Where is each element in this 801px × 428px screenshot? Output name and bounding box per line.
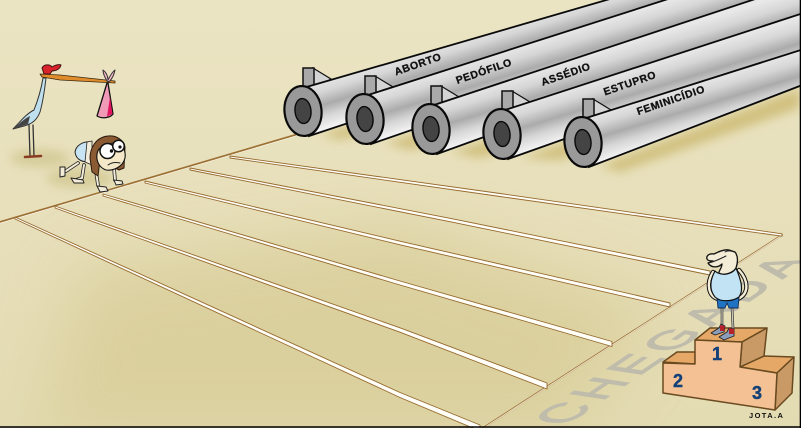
winner legs	[722, 307, 733, 328]
bundle	[97, 83, 113, 118]
baby diaper	[75, 142, 91, 162]
baby back	[85, 141, 92, 165]
label: assedio: ASSÉDIO	[539, 60, 592, 89]
baby eyes	[100, 144, 115, 158]
baby face	[97, 143, 125, 170]
winner shoes	[711, 324, 734, 340]
number 1: 1	[712, 344, 722, 364]
baby mouth	[108, 162, 120, 165]
winner arms	[709, 270, 746, 299]
podium top surfaces	[695, 328, 767, 342]
winner shorts	[717, 298, 739, 308]
label: estupro: ESTUPRO	[602, 69, 658, 98]
stork body and neck	[13, 78, 46, 129]
cannon 2: pedofilo	[344, 0, 801, 146]
winner head	[707, 250, 737, 274]
baby hair back	[90, 136, 125, 176]
label: aborto: ABORTO	[393, 51, 443, 78]
cannon shadows	[320, 75, 800, 172]
baby limbs	[62, 163, 115, 185]
track surface shading	[40, 225, 660, 428]
label: feminicidio: FEMINICÍDIO	[635, 82, 707, 118]
track outer edges	[0, 135, 782, 428]
podium numbers	[673, 344, 762, 403]
cannon labels	[393, 51, 707, 118]
label: pedofilo: PEDÓFILO	[454, 56, 514, 87]
cannon 3: assedio	[410, 0, 801, 156]
stork carrying bundle	[13, 65, 115, 157]
baby crawling	[60, 136, 125, 192]
cannon 1: aborto	[282, 0, 801, 138]
number 2: 2	[673, 371, 683, 391]
winner on podium	[707, 250, 746, 340]
cannon 4: estupro	[481, 0, 801, 161]
stork cap	[42, 65, 61, 74]
ground shadow under baby	[46, 168, 114, 188]
signature: JOTA.A	[749, 411, 784, 420]
track lines	[0, 135, 782, 428]
lane lines	[15, 156, 782, 428]
stork beak	[40, 74, 115, 83]
winner tank top	[711, 268, 742, 301]
stork legs	[29, 125, 34, 156]
baby feet and hands	[60, 167, 123, 192]
winner glasses and mouth	[708, 251, 736, 263]
number 3: 3	[752, 383, 762, 403]
ground shadow under stork	[10, 149, 70, 167]
podium side faces	[740, 328, 767, 367]
podium front face	[663, 340, 777, 410]
podium	[663, 328, 794, 410]
cannon 5: feminicidio	[562, 24, 801, 169]
